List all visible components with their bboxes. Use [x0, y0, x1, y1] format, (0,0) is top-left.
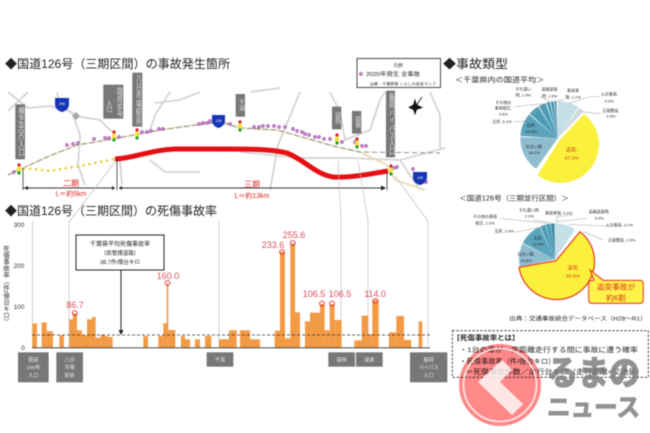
pie labels: 追越追抜	[542, 86, 558, 92]
pie labels	[492, 85, 620, 161]
phase 3 label: L＝約13km	[234, 191, 270, 200]
pie leader lines	[500, 215, 607, 240]
pie labels: 右折,	[534, 234, 543, 240]
map background roads	[8, 88, 445, 190]
label: Yokaichiba: 駅前	[65, 372, 75, 379]
pie labels: 追突,	[566, 147, 577, 154]
callout: prefecture average	[76, 235, 164, 270]
pie slices	[539, 120, 576, 157]
pie labels: 車両単	[567, 87, 579, 93]
pie labels: 時, 1.5%	[542, 92, 558, 98]
pie labels: その他の	[495, 99, 511, 105]
pie labels: 左折, 2.6%	[495, 228, 514, 234]
pie labels: 独, 1.1%	[565, 94, 581, 100]
label: Iioka bypass: 飯岡バイパス入口	[388, 93, 395, 156]
label: Higata	[207, 352, 233, 367]
second phase yellow dotted route	[23, 159, 115, 171]
label: Yokaichiba	[56, 352, 83, 382]
pie labels: 10.8%	[520, 258, 532, 263]
pie labels	[473, 206, 636, 279]
heading: accident locations: ◆国道126号（三期区間）の事故発生箇所	[5, 56, 230, 71]
pie labels: 人対車両,	[601, 90, 618, 96]
pie labels: 車両相互,	[495, 104, 512, 110]
phase 3 label	[234, 180, 270, 200]
traffic signals	[17, 120, 393, 176]
pie slices	[537, 241, 573, 277]
y axis labels: 300	[14, 222, 25, 229]
pie labels: 12.8%	[533, 242, 544, 247]
bars	[32, 283, 230, 348]
label: Higata	[236, 94, 245, 117]
pie labels: 出合い頭,	[517, 250, 535, 256]
pie labels: 60.5%	[566, 273, 581, 279]
route shields: 126	[417, 176, 423, 180]
bottom section labels	[18, 352, 447, 382]
map labels	[15, 73, 142, 159]
label: Fukuro-higashi	[352, 111, 361, 134]
label: route 296: 国道296号	[115, 87, 122, 118]
pie labels: 16.2%	[529, 150, 540, 155]
callout: about 60 percent: 追突事故が	[597, 281, 635, 291]
y axis labels: 100	[14, 304, 25, 311]
logo text: るまの	[547, 355, 640, 393]
pie labels: その他の車両	[473, 213, 497, 219]
watermark: logo: ニュース	[547, 394, 640, 422]
pie labels: 人対車両, 9.7%	[606, 221, 633, 227]
definition box: ・死傷事故率（件/億台キロ）	[459, 356, 555, 365]
label: Iioka bypass	[410, 352, 447, 382]
label: route 296 entrance: 国道	[28, 357, 38, 364]
label: route 296 entrance: 入口	[28, 373, 38, 379]
pie labels: 追突,	[568, 264, 579, 271]
arrow: to average line	[118, 270, 124, 335]
label: Higata: 干潟	[237, 99, 244, 113]
label: Fukuro-higashi	[356, 352, 383, 367]
callout: prefecture average: 千葉県平均死傷事故率	[90, 240, 150, 248]
label: route 296 entrance: 296号	[27, 365, 40, 371]
callout: about 60 percent	[589, 270, 643, 303]
definition box: 【死傷事故率とは】	[453, 333, 519, 342]
pie leader lines	[514, 97, 601, 122]
bars continued	[220, 243, 422, 348]
label: route 296 entrance	[18, 352, 49, 382]
pie labels: 2.8%	[606, 114, 616, 119]
yellow rear-end slice	[519, 232, 595, 300]
y axis labels: 0	[21, 345, 25, 352]
phase 2 label	[55, 179, 87, 198]
value labels: 106.5	[329, 289, 351, 299]
value labels: 114.0	[364, 289, 386, 299]
route 126 line	[8, 121, 425, 190]
label: Yokaichiba station: 八日市場駅前	[134, 75, 141, 126]
route shields: 296	[59, 102, 65, 106]
route shields	[55, 98, 427, 185]
chart: casualty accident rate	[2, 161, 430, 352]
phase 3 label: 三期	[244, 180, 260, 189]
watermark: logo	[459, 344, 640, 426]
y axis title: 死傷事故率（件/億台キロ）	[2, 245, 10, 325]
label: Fukuro-higashi: 袋東	[354, 116, 361, 130]
callout: prefecture average: （県管理道路）	[101, 249, 139, 257]
value labels: 233.6	[262, 240, 284, 250]
definition box: ＝死傷事故件数／走行台キロ（走行距離×交通量）	[465, 367, 644, 376]
label: Fukuro-nishi	[328, 352, 355, 367]
label: Fukuro-nishi: 袋西	[337, 356, 347, 363]
pie labels: 10.5%	[526, 129, 537, 134]
value labels: 160.0	[157, 271, 179, 281]
pie labels: 出合い頭,	[526, 143, 543, 149]
label: Yokaichiba: 八日	[65, 358, 75, 364]
heading: casualty accident rate: ◆国道126号（三期区間）の死傷事故率	[5, 203, 217, 218]
pie labels: 相互, 2.2%	[475, 220, 495, 226]
pie labels: 正面衝突, 1.5%	[608, 236, 636, 242]
value markers	[72, 241, 378, 315]
pie labels: 左折, 5.1%	[492, 118, 512, 124]
pie subtitle: ＜国道126号（三期並行区間）＞	[459, 194, 569, 203]
heading: accident types: ◆事故類型	[443, 56, 508, 71]
definition box: ・1台の車が一定距離走行する間に事故に遭う確率	[459, 345, 638, 354]
label: Yokaichiba: 市場	[65, 364, 75, 371]
pie chart: Chiba national road average	[455, 75, 620, 183]
map legend: 凡例	[393, 62, 403, 69]
label: route 296	[103, 85, 123, 119]
pie labels: 右折,	[527, 121, 536, 127]
value labels: 255.6	[283, 230, 305, 240]
phase 2 label: 二期	[63, 179, 79, 188]
map legend: 2020年発生 全事故	[366, 70, 421, 78]
pie subtitle: ＜千葉県内の国道平均＞	[455, 75, 544, 84]
pie labels: すれ違い	[515, 85, 531, 91]
pie labels: 正面衝突,	[602, 107, 620, 113]
compass mark	[409, 97, 422, 114]
phase dimension lines	[23, 159, 387, 200]
third phase red route	[115, 149, 388, 177]
label: route 296: 入口	[105, 101, 112, 114]
y axis labels: 200	[14, 263, 25, 270]
pie labels: 3.6%	[499, 111, 508, 116]
pie labels: 車両単独, 0.0%	[545, 209, 573, 215]
label: Yokoshibahikari IC: 横芝光IC入口	[17, 106, 24, 158]
definition box	[452, 331, 648, 377]
accident dots	[13, 120, 427, 183]
map legend: 出典：千葉県警 くらしの安全マップ	[370, 81, 437, 86]
section guide lines	[32, 161, 428, 347]
pie chart: route 126 section	[459, 194, 647, 323]
logo circle	[459, 344, 541, 426]
value labels: 106.5	[303, 289, 325, 299]
pie labels: すれ違い時,	[519, 206, 540, 212]
label: Iioka bypass: バイパス	[419, 365, 439, 371]
label: Fukuro-nishi	[332, 107, 341, 129]
pie labels: 2.2%	[525, 213, 534, 218]
label: Higata: 干潟	[215, 356, 225, 363]
pie labels: 時, 1.9%	[516, 92, 531, 98]
interchange mark	[72, 112, 80, 120]
source note: 出典：交通事故統合データベース（H28～R1）	[509, 315, 647, 323]
baseline and average dashed line	[32, 347, 430, 349]
value labels	[66, 230, 386, 310]
y axis labels	[14, 222, 25, 352]
map: route 126 accident locations	[8, 88, 445, 190]
pie labels: 47.3%	[565, 155, 579, 161]
pie labels: 追越追抜時,	[589, 208, 610, 214]
yellow rear-end slice	[537, 114, 599, 183]
phase 2 label: L＝約5km	[55, 189, 87, 198]
callout: about 60 percent: 約6割	[606, 293, 626, 303]
map legend	[357, 58, 440, 88]
pie labels: 0.0%	[595, 215, 604, 220]
pie labels: 9.0%	[605, 98, 614, 103]
route shields: 126	[216, 119, 222, 123]
railway dashed line	[8, 122, 440, 175]
label: Iioka bypass: 入口	[424, 373, 434, 379]
callout: prefecture average: 38.7件/億台キロ	[100, 258, 140, 266]
label: Iioka bypass: 飯岡	[424, 358, 434, 364]
label: Iioka bypass	[386, 91, 395, 157]
value labels: 86.7	[66, 300, 84, 310]
label: Fukuro-nishi: 袋西	[334, 111, 341, 125]
label: Fukuro-higashi: 袋東	[364, 356, 374, 363]
